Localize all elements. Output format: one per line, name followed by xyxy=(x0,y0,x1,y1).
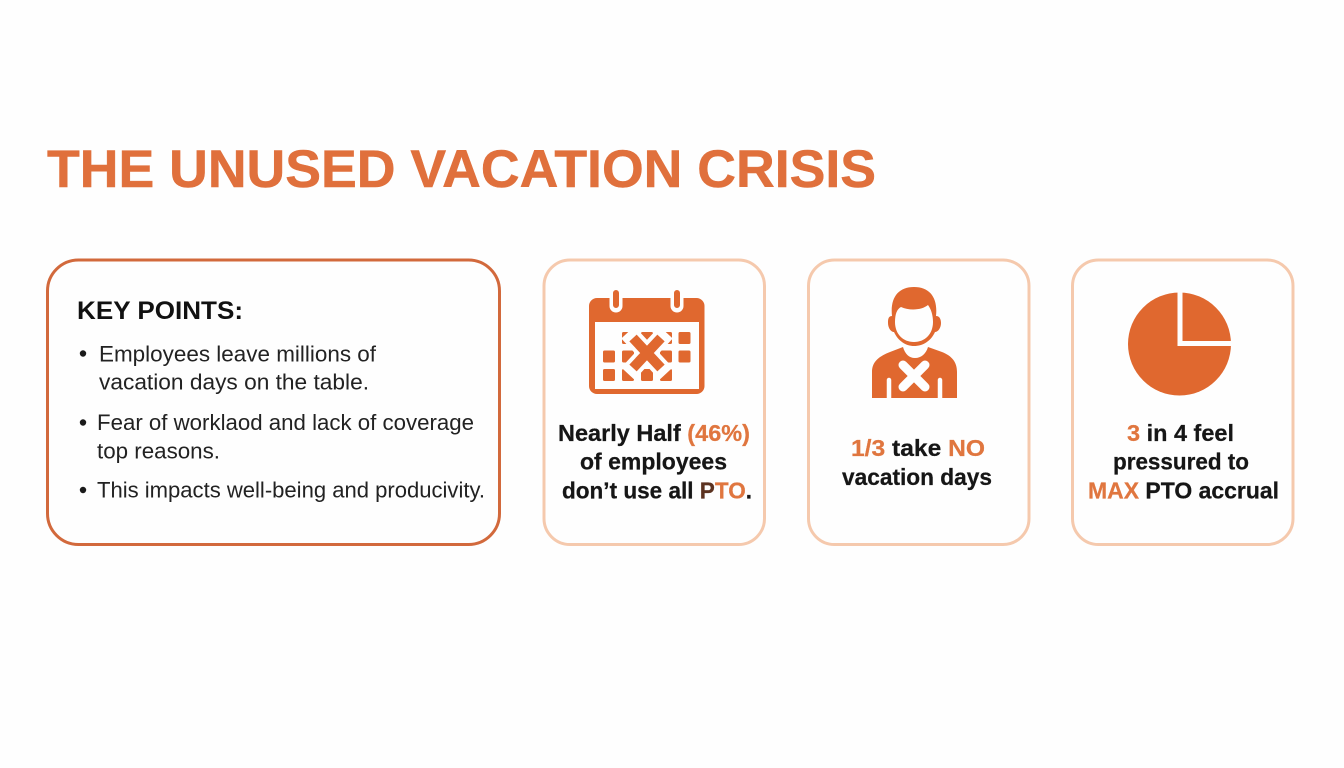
panel: one third stat xyxy=(808,260,1029,544)
icon: pie chart xyxy=(1128,290,1234,396)
text: nearly half: Nearly Half (46%) xyxy=(558,420,750,446)
text: one third: vacation days xyxy=(842,464,992,490)
text: one third xyxy=(842,435,992,490)
text: three in four: MAX PTO accrual xyxy=(1088,478,1279,504)
text: three in four: 3 in 4 feel xyxy=(1127,420,1234,446)
text block: bullet 1 xyxy=(80,342,377,394)
title: THE UNUSED VACATION CRISIS xyxy=(47,140,876,199)
text block: bullet 2: Fear of worklaod and lack of coverage xyxy=(97,410,474,435)
panel: three in four stat xyxy=(1072,260,1293,544)
text: one third: 1/3 take NO xyxy=(851,435,985,461)
text: three in four: pressured to xyxy=(1113,448,1249,474)
text: three in four xyxy=(1088,420,1279,504)
icon: person with x xyxy=(872,287,957,398)
icon: calendar with x xyxy=(589,293,704,394)
text block: bullet 1: vacation days on the table. xyxy=(99,370,369,394)
text block: bullet 2 xyxy=(80,410,474,464)
text block: bullet 2: top reasons. xyxy=(97,438,220,464)
text: nearly half xyxy=(558,420,752,504)
text: nearly half: of employees xyxy=(580,448,727,474)
heading: key points: KEY POINTS: xyxy=(77,297,243,325)
text: nearly half: don’t use all PTO. xyxy=(562,478,752,504)
text block: bullet 1: Employees leave millions of xyxy=(99,342,377,366)
panel: nearly half stat xyxy=(544,260,764,544)
panel: key points xyxy=(48,260,500,544)
text block: bullet 3: This impacts well-being and producivity. xyxy=(97,478,485,502)
